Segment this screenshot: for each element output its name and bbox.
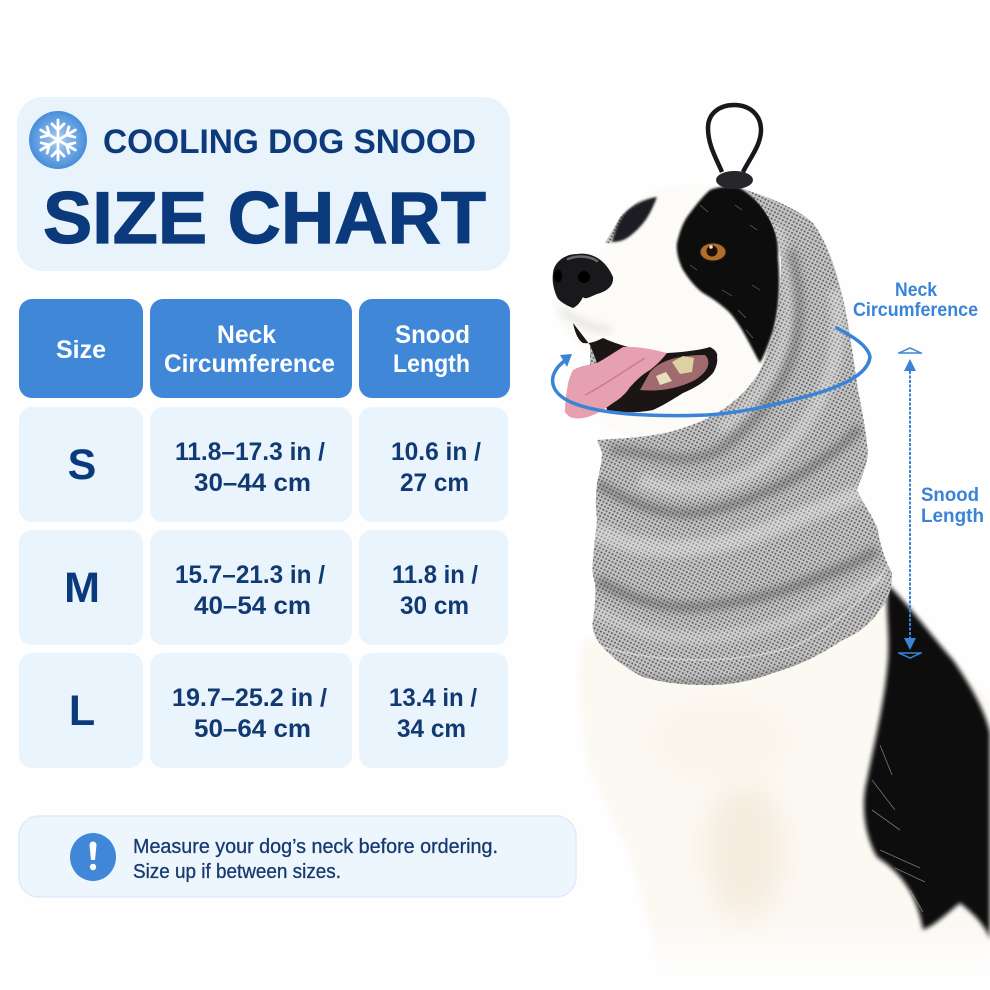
snood length measure bbox=[898, 348, 984, 658]
row: size L: L bbox=[69, 687, 95, 735]
hanging loop bbox=[708, 105, 761, 189]
table header row bbox=[19, 299, 510, 398]
row: size S: 10.6 in / bbox=[391, 438, 481, 466]
subtitle: COOLING DOG SNOOD bbox=[103, 123, 476, 161]
callout: measuring note bbox=[19, 816, 576, 897]
snood length label bbox=[921, 485, 984, 527]
table header row: Size bbox=[56, 336, 106, 364]
dog head bbox=[553, 185, 780, 440]
row: size S: 27 cm bbox=[400, 469, 469, 497]
muzzle shading bbox=[562, 310, 610, 330]
row: size M: 11.8 in / bbox=[392, 561, 478, 589]
icon: exclamation mark bbox=[70, 833, 116, 881]
snood fabric bbox=[592, 190, 892, 685]
table header row: Snood bbox=[395, 321, 470, 349]
neck label bbox=[853, 280, 978, 321]
row: size L: 19.7–25.2 in / bbox=[172, 684, 327, 712]
tongue bbox=[565, 347, 667, 418]
note text: Measure your dog’s neck before ordering. bbox=[133, 836, 498, 858]
snood length label: Length bbox=[921, 506, 984, 527]
neck label: Circumference bbox=[853, 300, 978, 321]
fur flecks on patch bbox=[690, 205, 760, 338]
table header row: Length bbox=[393, 350, 470, 378]
row: size M: 30 cm bbox=[400, 592, 469, 620]
far snood edge bbox=[605, 197, 657, 244]
main heading: SIZE CHART bbox=[43, 178, 486, 259]
far ear patch bbox=[612, 197, 657, 242]
row: size S: 30–44 cm bbox=[194, 469, 311, 497]
panel: title header bbox=[17, 97, 510, 271]
vertical dashed arrow bbox=[898, 348, 922, 658]
row: size M: 40–54 cm bbox=[194, 592, 311, 620]
mesh behind mouth bbox=[590, 338, 606, 365]
ring arrow bbox=[553, 328, 870, 416]
table header row: Neck bbox=[217, 321, 276, 349]
note text: Size up if between sizes. bbox=[133, 861, 341, 883]
row: size S: 11.8–17.3 in / bbox=[175, 438, 325, 466]
row: size S bbox=[19, 407, 508, 522]
row: size S: S bbox=[68, 441, 96, 489]
neck circumference measure bbox=[553, 280, 978, 416]
row: size L: 13.4 in / bbox=[389, 684, 477, 712]
row: size M: 15.7–21.3 in / bbox=[175, 561, 325, 589]
black back fur bbox=[864, 585, 990, 940]
black eye patch bbox=[677, 187, 779, 363]
neck label: Neck bbox=[895, 280, 937, 301]
note text bbox=[133, 836, 498, 883]
mouth bbox=[565, 323, 717, 418]
dog body bbox=[578, 585, 990, 990]
row: size M: M bbox=[64, 564, 100, 612]
row: size M bbox=[19, 530, 508, 645]
eye bbox=[699, 242, 727, 262]
nose bbox=[553, 254, 613, 308]
row: size L bbox=[19, 653, 508, 768]
dog with snood bbox=[553, 105, 990, 990]
size table bbox=[19, 299, 510, 768]
row: size L: 50–64 cm bbox=[194, 715, 311, 743]
table header row: Circumference bbox=[164, 350, 335, 378]
row: size L: 34 cm bbox=[397, 715, 466, 743]
icon: snowflake badge bbox=[29, 111, 87, 169]
snood length label: Snood bbox=[921, 485, 979, 506]
